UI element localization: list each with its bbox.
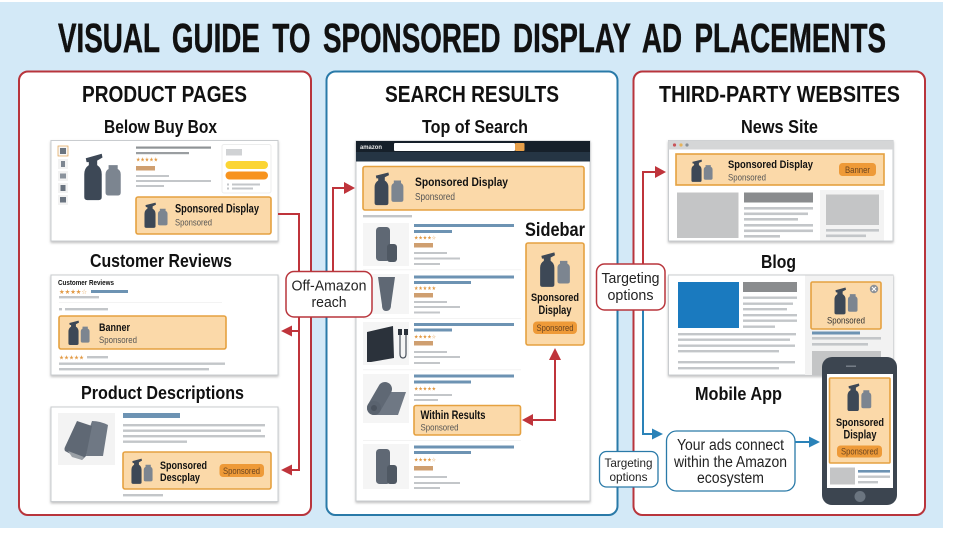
amazon header bar: amazon	[360, 144, 382, 151]
ad: within results: Within Results	[420, 410, 486, 422]
phone	[822, 357, 897, 505]
ad: sidebar: Display	[538, 303, 572, 317]
ad: banner: Sponsored	[99, 335, 137, 346]
ad: within results: Sponsored	[420, 422, 458, 434]
subheading: mobile app: Mobile App	[695, 384, 782, 404]
ad: within results	[414, 406, 520, 435]
callout: targeting options blue: Targeting	[604, 456, 652, 470]
arrow: targeting to callout	[643, 310, 663, 440]
ad: sponsored descplay: Descplay	[160, 472, 201, 484]
callout: targeting options red: options	[608, 288, 654, 304]
card: customer reviews	[51, 275, 278, 375]
thumbnails	[58, 146, 68, 205]
subheading: news site: News Site	[741, 117, 818, 137]
callout: off-amazon reach	[286, 272, 372, 317]
ad: sponsored display	[136, 197, 271, 234]
ad: banner	[59, 316, 226, 349]
panel: product pages	[19, 72, 311, 515]
result row 3	[363, 322, 514, 365]
result row 2: ★★★★★	[414, 285, 436, 292]
result row 1: ★★★★☆	[414, 234, 436, 242]
arrow: targeting to news site	[643, 166, 666, 264]
ad: sponsored descplay: Sponsored	[223, 466, 260, 476]
ad: blog	[811, 282, 881, 329]
ad: top of search: Sponsored	[415, 192, 455, 203]
ad: news banner: Banner	[845, 165, 870, 175]
callout: off-amazon reach: reach	[312, 294, 346, 311]
ad: sidebar: Sponsored	[531, 292, 579, 304]
result row 5	[363, 444, 514, 489]
card: below buy box	[51, 140, 278, 241]
ad: phone: Display	[844, 430, 877, 442]
ad: sponsored display: Sponsored Display	[175, 204, 259, 216]
ad: banner: Banner	[99, 322, 131, 334]
ad: phone	[830, 378, 890, 463]
callout: targeting options red	[596, 264, 665, 310]
subheading: below buy box: Below Buy Box	[104, 117, 217, 137]
callout: your ads connect: within the Amazon	[673, 454, 787, 471]
subheading: top of search: Top of Search	[422, 117, 528, 137]
ad: blog: Sponsored	[827, 316, 865, 326]
ad: phone: Sponsored	[836, 417, 884, 429]
ad: sponsored display: Sponsored	[175, 218, 212, 228]
ad: phone: Sponsored	[841, 446, 878, 456]
ad: news banner	[676, 154, 884, 185]
heading: third-party websites: THIRD-PARTY WEBSITES	[659, 81, 900, 107]
card: news site	[668, 140, 893, 241]
subheading: product descriptions: Product Descriptions	[81, 383, 244, 403]
result row 4 with ad	[363, 374, 520, 435]
ad: sidebar	[526, 243, 584, 345]
arrow: callout to phone	[795, 436, 820, 448]
result row 5: ★★★★☆	[414, 456, 436, 464]
heading: product pages: PRODUCT PAGES	[82, 81, 247, 107]
callout: off-amazon reach: Off-Amazon	[292, 278, 366, 294]
result row 2	[363, 274, 514, 314]
result row 4 with ad: ★★★★★	[414, 386, 436, 392]
result row 3: ★★★★☆	[414, 334, 436, 340]
card: customer reviews: Customer Reviews	[58, 280, 114, 287]
card: product descriptions	[51, 407, 278, 502]
icon: product case	[64, 421, 108, 460]
card: customer reviews: ★★★★★	[59, 354, 84, 362]
result row 1	[363, 223, 514, 266]
ad: top of search	[363, 166, 584, 210]
sidebar label: Sidebar	[525, 220, 586, 241]
ad: news banner: Sponsored	[728, 172, 766, 184]
icon: product bottles	[84, 154, 121, 200]
callout: your ads connect	[666, 431, 795, 491]
callout: targeting options red: Targeting	[602, 271, 660, 287]
panel: search results	[326, 72, 618, 515]
callout: targeting options blue	[600, 452, 658, 487]
callout: targeting options blue: options	[610, 470, 648, 484]
card: below buy box: ★★★★★	[136, 156, 158, 164]
browser: search page	[356, 141, 590, 501]
buy box	[222, 144, 271, 193]
heading: search results: SEARCH RESULTS	[385, 81, 559, 107]
ad: sidebar: Sponsored	[536, 323, 574, 333]
subheading: blog: Blog	[761, 252, 796, 272]
amazon header bar	[356, 141, 590, 162]
card: blog	[668, 275, 893, 375]
arrow: off-amazon to top of search	[333, 182, 355, 271]
ad: sponsored descplay	[123, 452, 271, 489]
ad: sponsored descplay: Sponsored	[160, 460, 207, 472]
callout: your ads connect: Your ads connect	[677, 437, 785, 454]
icon: rolled mat	[367, 389, 406, 415]
ad: top of search: Sponsored Display	[415, 175, 508, 189]
arrow: sidebar to within results	[522, 348, 561, 426]
panel: third-party websites	[634, 72, 925, 515]
ad: news banner: Sponsored Display	[728, 159, 814, 171]
arrows: product page connectors	[278, 214, 299, 476]
card: customer reviews: ★★★★☆	[59, 288, 87, 296]
callout: your ads connect: ecosystem	[697, 470, 764, 487]
subheading: customer reviews: Customer Reviews	[90, 251, 232, 271]
